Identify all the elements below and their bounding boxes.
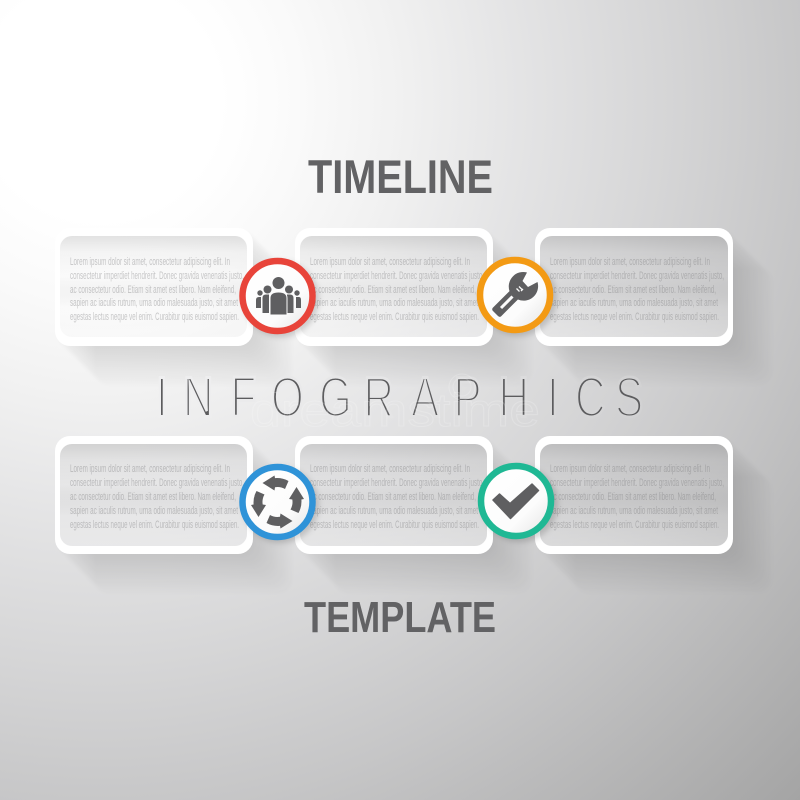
- heading: INFOGRAPHICS: S: [615, 365, 643, 429]
- panel text: Lorem ipsum dolor sit amet, consectetur adipiscing elit. In: [70, 256, 230, 268]
- panel text: Lorem ipsum dolor sit amet, consectetur adipiscing elit. In: [310, 256, 470, 268]
- panel text: egestas lectus neque vel enim. Curabitur quis euismod sapien.: [310, 311, 479, 323]
- heading: INFOGRAPHICS: I: [547, 365, 559, 429]
- panel: top right: [535, 228, 772, 385]
- icon badge: orange wrench: [480, 260, 557, 336]
- heading: INFOGRAPHICS: I: [156, 365, 168, 429]
- panel text: [550, 463, 724, 531]
- panel text: ac consectetur odio. Etiam sit amet est libero. Nam eleifend,: [310, 284, 476, 296]
- title: TIMELINE: TIMELINE: [308, 150, 493, 203]
- heading: INFOGRAPHICS: F: [230, 365, 256, 429]
- panel text: consectetur imperdiet hendrerit. Donec gravida venenatis justo,: [70, 270, 244, 282]
- panel text: consectetur imperdiet hendrerit. Donec gravida venenatis justo,: [310, 477, 484, 489]
- heading: INFOGRAPHICS: N: [183, 365, 213, 429]
- heading: INFOGRAPHICS: A: [411, 365, 440, 429]
- panel: bottom middle: [295, 436, 532, 593]
- icon: four circular arrows: [251, 476, 304, 528]
- icon: group of people: [256, 277, 301, 315]
- watermark: dreamstime: [250, 384, 540, 436]
- icon badge: red people: [242, 261, 319, 337]
- panel text: [310, 463, 484, 531]
- panel text: ac consectetur odio. Etiam sit amet est libero. Nam eleifend,: [310, 491, 476, 503]
- panel text: ac consectetur odio. Etiam sit amet est libero. Nam eleifend,: [70, 284, 236, 296]
- panel text: egestas lectus neque vel enim. Curabitur quis euismod sapien.: [70, 519, 239, 531]
- panel text: consectetur imperdiet hendrerit. Donec gravida venenatis justo,: [310, 270, 484, 282]
- panel: bottom left: [55, 436, 292, 593]
- panel text: [550, 256, 724, 323]
- heading: INFOGRAPHICS: R: [364, 365, 394, 429]
- panel text: consectetur imperdiet hendrerit. Donec gravida venenatis justo,: [70, 477, 244, 489]
- panel: top middle: [295, 228, 532, 385]
- title: TEMPLATE: TEMPLATE: [304, 593, 496, 642]
- panel text: Lorem ipsum dolor sit amet, consectetur adipiscing elit. In: [70, 463, 230, 475]
- heading: INFOGRAPHICS: P: [454, 365, 482, 429]
- panel text: sapien ac iaculis rutrum, urna odio malesuada justo, sit amet: [70, 297, 238, 309]
- icon: check mark: [493, 484, 538, 518]
- panel text: [310, 256, 484, 323]
- panel text: egestas lectus neque vel enim. Curabitur quis euismod sapien.: [310, 519, 479, 531]
- heading: INFOGRAPHICS: H: [498, 365, 529, 429]
- panel text: sapien ac iaculis rutrum, urna odio malesuada justo, sit amet: [310, 505, 478, 517]
- panel text: Lorem ipsum dolor sit amet, consectetur adipiscing elit. In: [310, 463, 470, 475]
- panel text: sapien ac iaculis rutrum, urna odio malesuada justo, sit amet: [310, 297, 478, 309]
- heading: INFOGRAPHICS: G: [319, 365, 352, 429]
- heading: INFOGRAPHICS: C: [575, 365, 605, 429]
- panel text: [70, 256, 244, 323]
- panel text: ac consectetur odio. Etiam sit amet est libero. Nam eleifend,: [70, 491, 236, 503]
- icon: wrench: [492, 272, 538, 317]
- panel text: sapien ac iaculis rutrum, urna odio malesuada justo, sit amet: [70, 505, 238, 517]
- watermark: [250, 374, 540, 436]
- heading: INFOGRAPHICS: [156, 365, 643, 429]
- heading: INFOGRAPHICS: O: [271, 365, 304, 429]
- panel text: egestas lectus neque vel enim. Curabitur quis euismod sapien.: [70, 311, 239, 323]
- icon badge: green check: [481, 466, 558, 542]
- panel: top left: [55, 228, 292, 385]
- panel text: [70, 463, 244, 531]
- panel: bottom right: [535, 436, 772, 593]
- icon badge: blue cycle: [242, 467, 319, 543]
